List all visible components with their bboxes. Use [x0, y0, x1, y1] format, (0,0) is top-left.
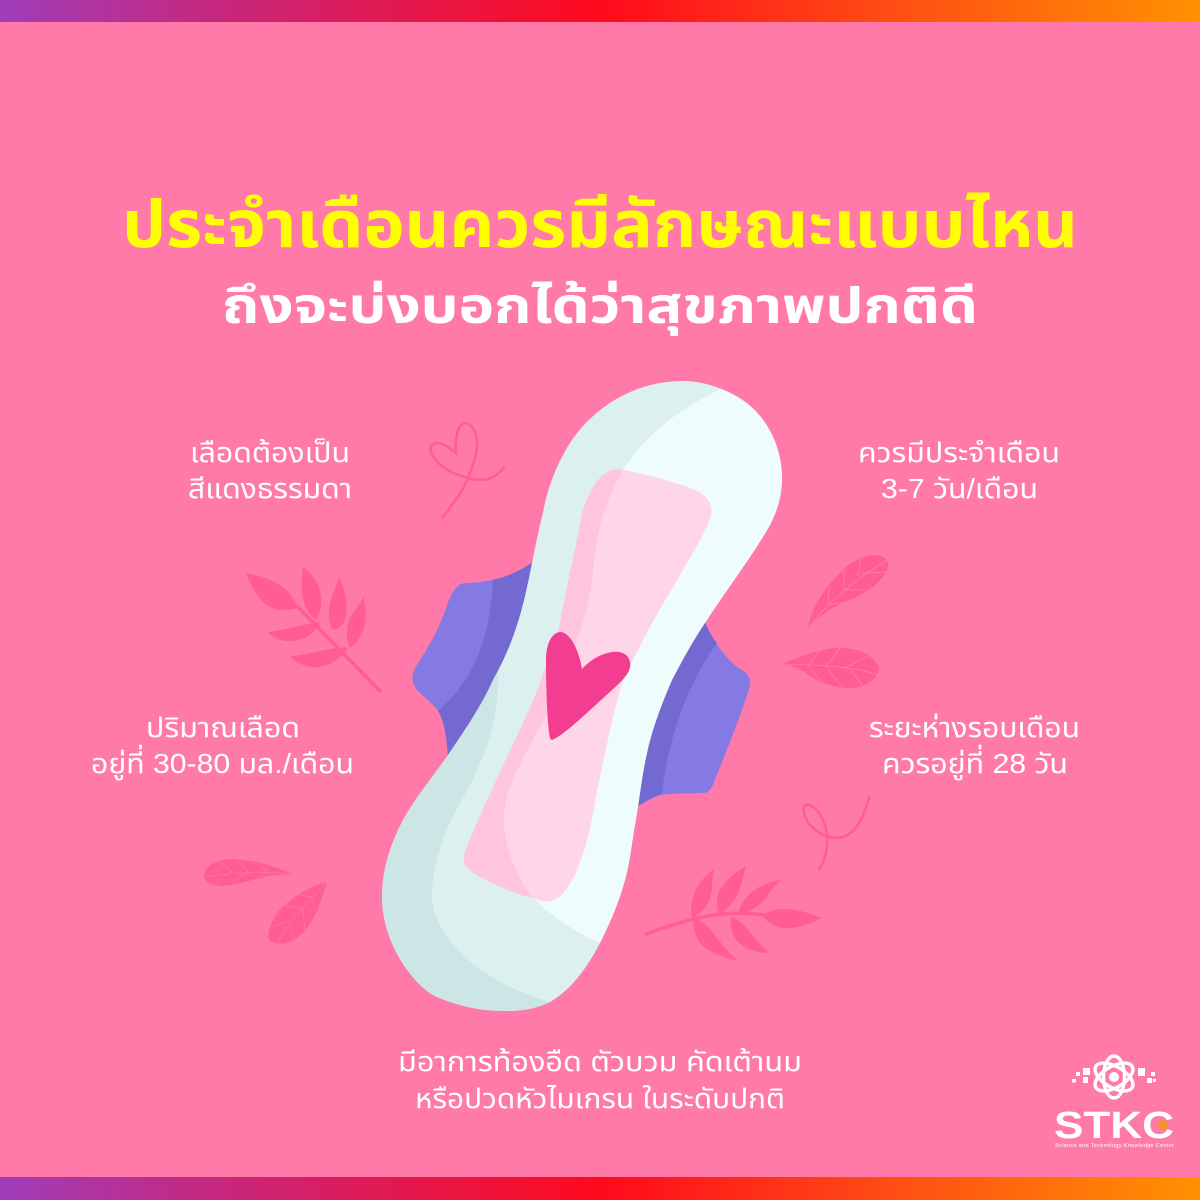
icon: heart — [546, 632, 630, 740]
icon: lower-left feather leaves — [204, 859, 327, 944]
icon: right feather leaves — [783, 555, 888, 688]
text: period duration: 3-7 วัน/เดือน — [881, 473, 1038, 504]
text: cycle length: ควรอยู่ที่ 28 วัน — [882, 744, 1068, 781]
text: symptoms — [398, 1046, 802, 1114]
text: cycle length: ระยะห่างรอบเดือน — [869, 712, 1080, 743]
bottom gradient bar — [0, 1177, 1200, 1200]
icon: upper-left leaf branch — [246, 567, 380, 691]
logo pixel squares — [1072, 1068, 1156, 1083]
icon: ribbon heart — [431, 423, 504, 518]
logo: STKC — [1054, 1056, 1174, 1149]
leaf — [268, 882, 327, 944]
absorbent core highlight — [504, 470, 711, 901]
left wing — [412, 562, 560, 758]
text: blood colour — [188, 437, 352, 504]
pad shadow — [382, 671, 550, 1011]
logo tagline: Science and Technology Knowledge Center — [1055, 1143, 1174, 1149]
illustration: sanitary pad — [382, 381, 782, 1011]
icon: ribbon right — [804, 797, 869, 869]
text: blood colour: สีแดงธรรมดา — [188, 473, 352, 504]
text: period duration: ควรมีประจำเดือน — [858, 437, 1060, 468]
leaf — [204, 859, 292, 886]
leaf — [783, 648, 879, 688]
logo atom icon — [1091, 1056, 1137, 1098]
right wing — [610, 622, 750, 806]
logo wordmark: STKC — [1054, 1105, 1174, 1147]
title: ประจำเดือนควรมีลักษณะแบบไหน — [122, 187, 1078, 261]
logo dot — [1158, 1120, 1168, 1130]
absorbent core — [464, 469, 711, 901]
text: cycle length — [869, 712, 1080, 781]
text: blood volume — [91, 712, 354, 781]
subtitle: ถึงจะบ่งบอกได้ว่าสุขภาพปกติดี — [222, 278, 978, 336]
pad highlight — [534, 389, 782, 943]
leaf — [808, 555, 888, 628]
pad body — [382, 381, 782, 1011]
text: symptoms: หรือปวดหัวไมเกรน ในระดับปกติ — [415, 1083, 785, 1114]
icon: lower-right leaf branch — [646, 866, 822, 961]
text: blood colour: เลือดต้องเป็น — [190, 437, 350, 468]
text: blood volume: อยู่ที่ 30-80 มล./เดือน — [91, 744, 354, 781]
top gradient bar — [0, 0, 1200, 22]
text: symptoms: มีอาการท้องอืด ตัวบวม คัดเต้านม — [398, 1046, 802, 1077]
text: blood volume: ปริมาณเลือด — [146, 712, 300, 743]
text: period duration — [858, 437, 1060, 504]
